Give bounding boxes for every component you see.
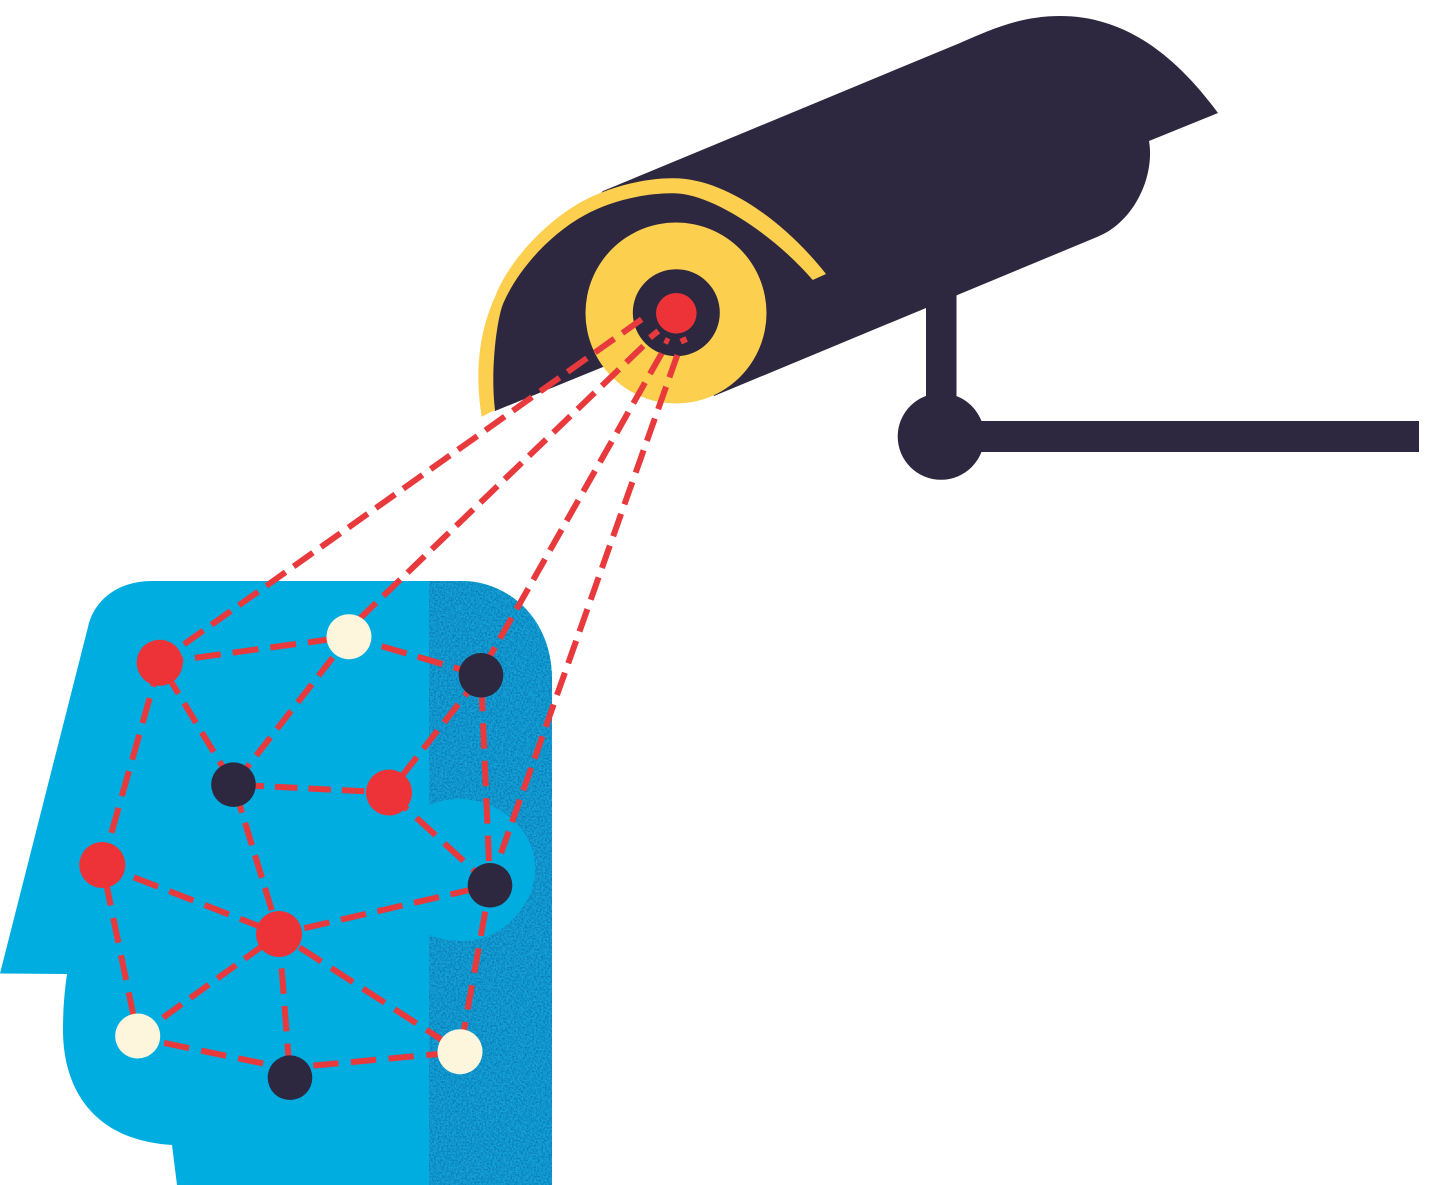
- camera body: [488, 16, 1218, 411]
- scan beams: [183, 319, 687, 853]
- camera lens: [586, 222, 766, 404]
- facial mesh nodes: [79, 614, 512, 1100]
- head silhouette: [0, 575, 559, 1185]
- camera mount: [898, 280, 1419, 480]
- camera yellow trim: [478, 178, 826, 417]
- ear: [429, 799, 535, 941]
- facial mesh lines: [102, 637, 490, 1078]
